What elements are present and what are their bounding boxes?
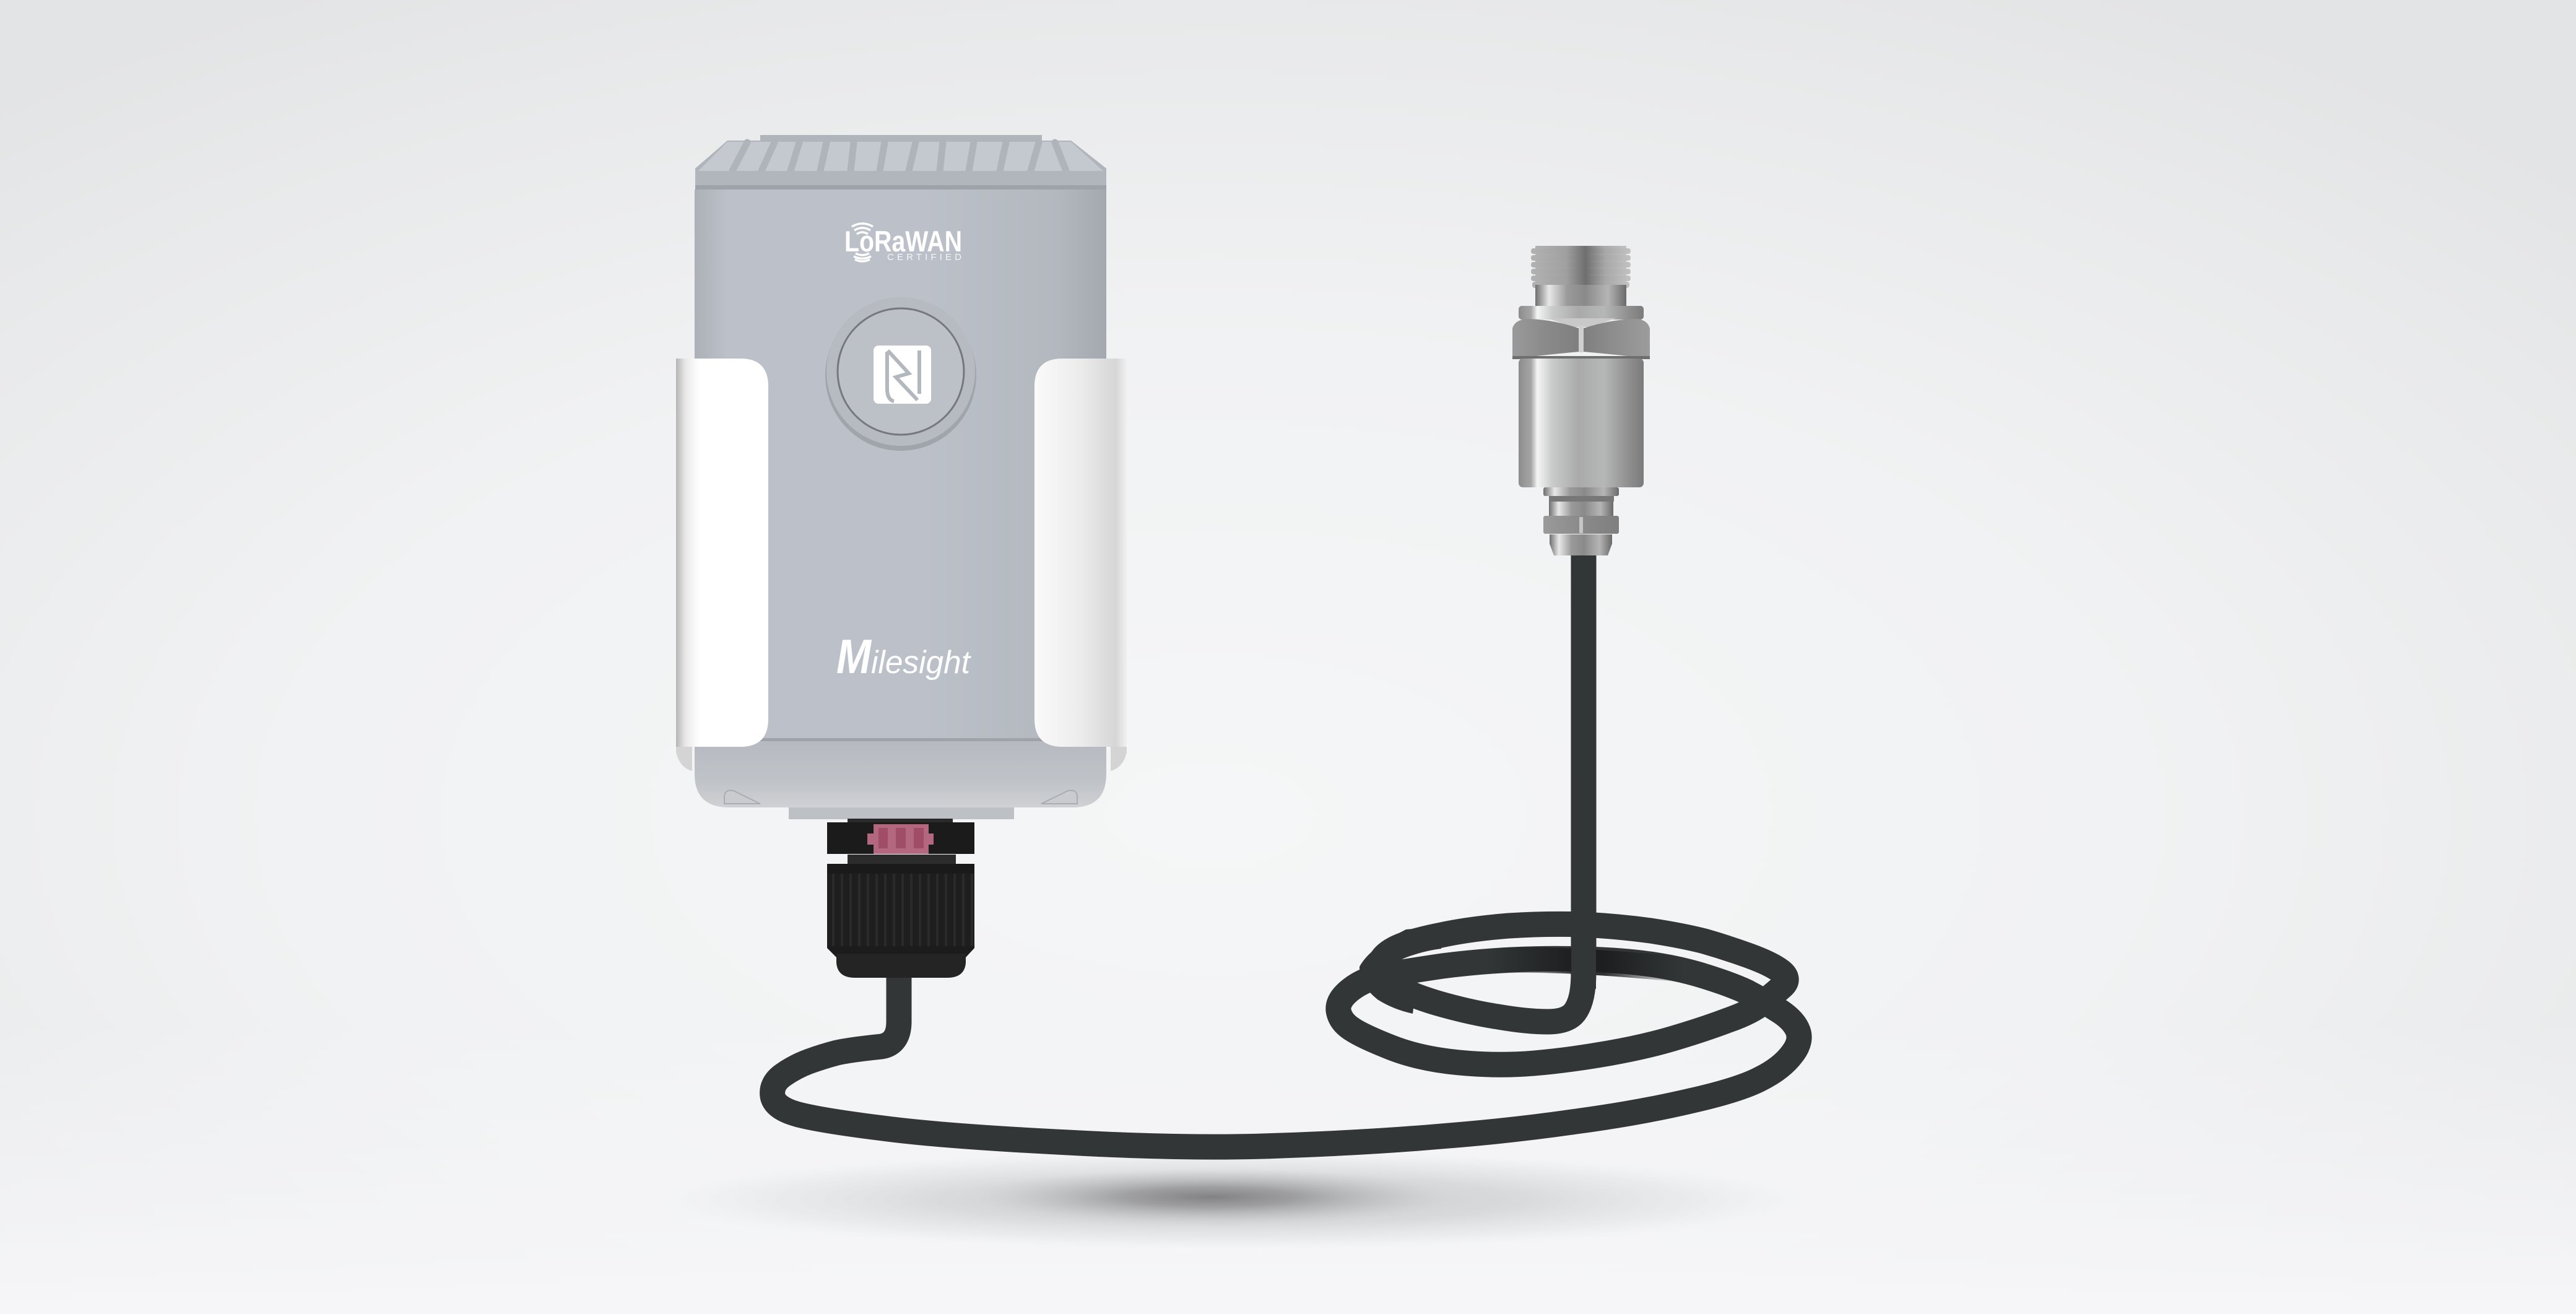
cable from gland, looped to the probe xyxy=(773,555,1799,1147)
probe lead in front of the coil xyxy=(1571,555,1596,989)
LoRaWAN logo: LoRaWAN xyxy=(844,225,962,258)
cable: wide left shoulder of the coil xyxy=(1360,926,1449,1014)
gland dome xyxy=(836,954,966,978)
pink terminal connector xyxy=(867,824,934,854)
probe lower fittings xyxy=(1543,487,1619,555)
mounting clip right xyxy=(1034,359,1127,771)
lower base xyxy=(695,738,1106,819)
Milesight logo xyxy=(836,629,972,684)
mounting clip left xyxy=(676,359,768,771)
probe collar xyxy=(1519,306,1644,320)
gland ribbed nut xyxy=(827,864,974,957)
LoRaWAN logo: CERTIFIED xyxy=(887,252,961,263)
Milesight logo: M xyxy=(836,629,872,684)
gland hex base xyxy=(827,822,974,854)
device: LoRaWAN sensor enclosure xyxy=(676,135,1127,819)
floor shadow xyxy=(656,1151,1808,1250)
cable: shading behind the lead xyxy=(1486,960,1684,970)
cable gland xyxy=(827,819,974,978)
top cap with fins xyxy=(695,135,1106,189)
main body xyxy=(695,189,1106,741)
probe cylinder xyxy=(1519,359,1644,487)
probe hex nut xyxy=(1512,318,1650,359)
probe threaded tip xyxy=(1531,246,1631,288)
probe: stainless pressure sensor xyxy=(1512,246,1650,555)
probe neck xyxy=(1535,285,1626,307)
Milesight logo: ilesight xyxy=(871,645,972,681)
gland thread xyxy=(848,855,956,864)
gland lock nut xyxy=(848,819,953,824)
NFC button xyxy=(825,297,976,451)
icon: NFC N mark xyxy=(874,346,931,404)
